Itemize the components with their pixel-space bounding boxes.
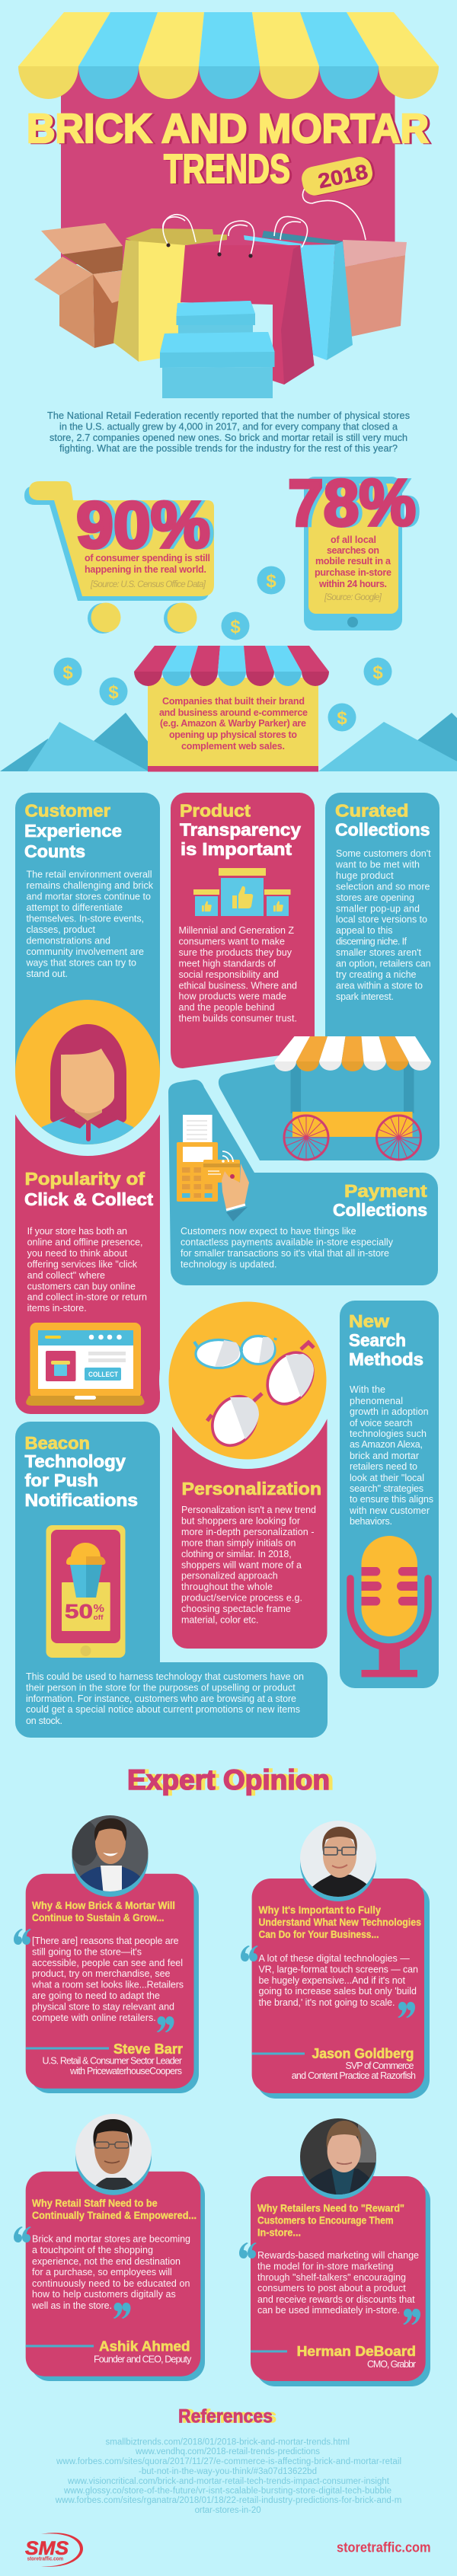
icon: yellow shopping bag (113, 215, 227, 362)
body text: search" strategies (350, 1483, 423, 1494)
attribution: CMO, Grabbr (367, 2359, 416, 2370)
body text: for smaller transactions so it's vital that all in-store (181, 1248, 389, 1259)
body text: want to be met with (335, 859, 420, 870)
heading: Transparency (180, 820, 301, 840)
heading: Methods (349, 1349, 423, 1369)
intro paragraph: store, 2.7 companies opened new ones. So brick and mortar retail is still very much (50, 433, 407, 443)
quote text: the model for in-store marketing (257, 2262, 394, 2272)
body text (26, 1671, 304, 1726)
icon: phone with 50% off offer: 50 (65, 1600, 93, 1623)
attribution (94, 2338, 192, 2365)
body text: them builds consumer trust. (178, 1013, 297, 1024)
body text: stores are opening (336, 892, 414, 903)
body text: as Amazon Alexa, (350, 1439, 423, 1450)
photo: Jason Goldberg (300, 1821, 376, 1901)
quote text: consumers to post about a product (257, 2283, 406, 2294)
quote text: compete with online retailers. (32, 2013, 156, 2023)
expert card: Jason Goldberg (241, 1816, 430, 2099)
quote text: be hugely expensive...And if it's not (259, 1975, 406, 1986)
heading: is Important (181, 839, 292, 859)
icons: dollar coins: $ (230, 617, 241, 637)
heading: Counts (24, 841, 85, 861)
logo: SMS storetraffic: storetraffic.com (27, 2557, 63, 2562)
photo: Herman DeBoard (300, 2118, 376, 2199)
quote text: can be used immediately in-store. (257, 2305, 400, 2316)
heading: Notifications (24, 1490, 138, 1510)
quote text (31, 1936, 184, 2023)
intro paragraph: The National Retail Federation recently reported that the number of physical stores (47, 410, 410, 421)
icon: closing quote (398, 2002, 415, 2018)
quote heading: Why Retailers Need to "Reward" (257, 2202, 404, 2214)
body text: of voice search (350, 1418, 413, 1428)
heading (24, 801, 122, 861)
body text: discerning niche. If (336, 937, 407, 947)
icon: pink shopping bag (181, 221, 314, 385)
body text (181, 1226, 394, 1269)
heading: for Push (24, 1470, 98, 1490)
quote text: experience, not the end destination (32, 2256, 181, 2267)
body text: Personalization isn't a new trend (181, 1505, 316, 1515)
icon: closing quote (113, 2303, 131, 2319)
quote text: well as in the store. (31, 2300, 112, 2311)
title (27, 106, 429, 192)
references list: www.forbes.com/sites/rganatra/2018/01/18/22-retail-industry-predictions-for-brick-and-m (55, 2496, 401, 2505)
icon: shop assistant portrait (15, 1000, 160, 1150)
body text (27, 1226, 147, 1314)
icon: opening quote (14, 2226, 31, 2242)
heading: Collections (335, 820, 430, 840)
panel: payment collections (168, 1080, 438, 1285)
quote text: how to help customers digitally as (32, 2289, 176, 2300)
quote heading: Continually Trained & Empowered... (32, 2209, 197, 2221)
heading: Personalization (181, 1479, 321, 1499)
icon: closing quote (157, 2016, 174, 2032)
statement text: complement web sales. (181, 741, 285, 752)
body text: selection and so more (336, 881, 430, 892)
statement text: opening up physical stores to (169, 729, 297, 740)
body text: area within a store to (336, 980, 423, 991)
statement text: and business around e-commerce (159, 707, 308, 718)
body text: choosing spectacle frame (181, 1604, 291, 1614)
heading: references: References (178, 2406, 273, 2428)
body text: Some customers don't (336, 848, 431, 859)
body text: and mortar stores continue to (26, 892, 151, 902)
panel: popularity of click and collect (4, 988, 171, 1414)
logo: SMS storetraffic (25, 2533, 83, 2567)
attribution (297, 2343, 416, 2370)
icon: gift box (343, 240, 407, 337)
body text: phenomenal (350, 1396, 403, 1406)
attribution (43, 2041, 183, 2076)
attribution (292, 2045, 416, 2081)
attribution: and Content Practice at Razorfish (292, 2070, 416, 2081)
body text: contactless payments available in-store especially (181, 1237, 394, 1247)
quote text: A lot of these digital technologies — (259, 1953, 410, 1964)
body text: on stock. (26, 1716, 62, 1726)
heading: Payment (344, 1181, 427, 1201)
quote text: for a purchase, so employees will (32, 2267, 172, 2278)
references list: www.glossy.co/store-of-the-future/vr-isnt-scalable-bursting-store-digital-tech-bubble (63, 2487, 391, 2496)
body text: their person in the store for the purposes of upselling or product (26, 1683, 296, 1693)
panel: new search methods (340, 1301, 439, 1688)
quote heading: Customers to Encourage Them (257, 2214, 394, 2226)
expert card: Ashik Ahmed (14, 2109, 205, 2381)
quote text: continuously need to be educated on (32, 2278, 190, 2289)
icon: card terminal and hand (177, 1115, 249, 1221)
quote text: physical store to stay relevant and (32, 2001, 174, 2012)
body text (349, 1384, 433, 1527)
statement text (159, 696, 308, 752)
quote text: are going to need to adapt the (32, 1990, 160, 2001)
body text: The retail environment overall (26, 870, 152, 880)
quote text: through "shelf-talkers" encouraging (257, 2272, 406, 2283)
quote text: accessible, people can see and feel (32, 1958, 183, 1968)
body text: spark interest. (336, 991, 394, 1002)
heading: Experience (24, 821, 122, 841)
small store with statement (134, 646, 329, 772)
body text: If your store has both an (27, 1226, 127, 1237)
statement text: Companies that built their brand (162, 696, 305, 707)
panel: curated collections and cart (219, 793, 439, 1160)
description: of consumer spending is still (85, 553, 210, 563)
icon: laptop with collect page: COLLECT (88, 1371, 118, 1378)
icon: thumbs-up podium (193, 868, 291, 916)
body text: growth in adoption (350, 1406, 429, 1417)
panel: product transparency (171, 793, 315, 1068)
attribution: Jason Goldberg (312, 2045, 414, 2061)
body text: an option, retailers can (336, 958, 431, 969)
price tag: 2018 (299, 154, 377, 240)
body text: meet high standards of (178, 958, 276, 969)
body text: material, color etc. (181, 1614, 259, 1625)
heading: Customer (24, 801, 110, 821)
store awning (134, 646, 329, 686)
description: searches on (327, 545, 379, 556)
icon: market cart (274, 1036, 431, 1160)
statement text: (e.g. Amazon & Warby Parker) are (160, 718, 306, 729)
body text: ethical business. Where and (178, 980, 297, 991)
references list: www.forbes.com/sites/quora/2017/11/27/e-commerce-is-affecting-brick-and-mortar-retail (56, 2457, 401, 2466)
quote heading: In-store... (257, 2226, 301, 2239)
panel: personalization (159, 1292, 336, 1649)
panel: customer experience counts (15, 793, 160, 1150)
panel: beacon technology (15, 1422, 328, 1738)
icons: dollar coins: $ (108, 682, 119, 703)
logo: SMS storetraffic: SMS (25, 2538, 69, 2559)
icons: dollar coins (53, 567, 391, 731)
figure 78%: 78% (288, 467, 416, 540)
quote heading: Understand What New Technologies (259, 1916, 421, 1928)
icon: stacked blue boxes (160, 301, 274, 398)
description: within 24 hours. (318, 579, 387, 589)
heading: Popularity of (24, 1169, 145, 1189)
body text: demonstrations and (26, 935, 110, 946)
quote heading (32, 2197, 197, 2221)
references list: smallbiztrends.com/2018/01/2018-brick-and-mortar-trends.html (105, 2438, 350, 2447)
body text: shoppers will want more of a (181, 1559, 302, 1570)
cart shadow (24, 486, 209, 601)
body text: technology is updated. (181, 1259, 277, 1269)
heading: Search (349, 1330, 406, 1350)
references list: -but-not-in-the-way-you-think/#3a07d13622bd (139, 2467, 317, 2476)
body text: stand out. (26, 969, 68, 979)
description: happening in the real world. (85, 564, 206, 575)
body text: more than simply initials on (181, 1537, 296, 1548)
body text (181, 1505, 316, 1625)
body text: remains challenging and brick (26, 880, 154, 891)
body text: local store versions to (336, 915, 427, 925)
stat: tablet 78% (288, 467, 416, 630)
quote heading: Why & How Brick & Mortar Will (32, 1899, 175, 1911)
quote text: product, try on merchandise, see (32, 1968, 171, 1979)
icon: phone with 50% off offer: % (93, 1602, 104, 1615)
attribution: Herman DeBoard (297, 2343, 416, 2359)
quote text: what a room set looks like...Retailers (31, 1980, 184, 1990)
body text: information. For instance, customers who are browsing at a store (26, 1693, 296, 1704)
quote text: and receive rewards or discounts that (257, 2294, 415, 2305)
heading (24, 1433, 138, 1510)
quote text: Brick and mortar stores are becoming (32, 2234, 190, 2245)
quote text: [There are] reasons that people are (32, 1936, 179, 1946)
figure 90%: 90% (76, 489, 210, 562)
body text: smaller stores aren't (336, 947, 422, 958)
photo: Ashik Ahmed (75, 2114, 152, 2195)
icon: laptop with collect page (26, 1323, 145, 1406)
quote heading: Why Retail Staff Need to be (32, 2197, 158, 2209)
description (85, 553, 210, 589)
body text: and collect" where (27, 1270, 105, 1281)
body text: and the people behind (178, 1002, 275, 1013)
title: BRICK AND MORTAR (27, 106, 429, 152)
quote text: a touchpoint of the shopping (32, 2245, 153, 2255)
body text: huge product (336, 870, 394, 881)
cart body (29, 481, 214, 596)
references list: ortar-stores-in-20 (195, 2506, 261, 2515)
heading (180, 801, 301, 859)
description: of all local (331, 535, 376, 545)
references list (55, 2438, 401, 2515)
heading: New (349, 1311, 389, 1331)
body text: how products were made (178, 991, 286, 1002)
body text: could get a special notice about current promotions or new items (26, 1704, 300, 1715)
quote text (31, 2234, 190, 2311)
body text: smaller pop-up and (336, 903, 420, 914)
body text: more in-depth personalization - (181, 1527, 314, 1537)
icons: dollar coins: $ (337, 708, 347, 729)
quote text: VR, large-format touch screens — can (259, 1965, 418, 1975)
icon: opening quote (239, 2242, 257, 2258)
body text: appeal to this (336, 925, 393, 936)
storefront wall (61, 66, 395, 264)
body text: items in-store. (27, 1303, 87, 1314)
description (315, 535, 391, 602)
body text (26, 870, 154, 979)
heading: Product (180, 801, 251, 821)
attribution: Founder and CEO, Deputy (94, 2354, 192, 2365)
store body (148, 678, 318, 766)
attribution: Steve Barr (113, 2041, 183, 2057)
photo: Steve Barr (72, 1815, 148, 1897)
body text: personalized approach (181, 1571, 278, 1582)
quote text: the brand,' it's not going to scale. (259, 1997, 395, 2008)
icon: opening quote (241, 1946, 258, 1962)
website address: storetraffic.com (337, 2540, 431, 2555)
description: mobile result in a (315, 556, 391, 567)
attribution: SVP of Commerce (346, 2060, 414, 2071)
body text: with new customer (349, 1505, 430, 1516)
body text (178, 925, 297, 1024)
body text: social responsibility and (178, 969, 279, 980)
quote heading: Can Do for Your Business... (259, 1928, 379, 1940)
description: purchase in-store (315, 567, 391, 578)
intro paragraph (47, 410, 410, 454)
body text: you need to think about (27, 1248, 128, 1259)
striped awning (18, 12, 439, 99)
body text: Customers now expect to have things like (181, 1226, 356, 1237)
body text: community involvement are (26, 946, 144, 957)
body text: attempt to differentiate (26, 902, 123, 913)
body text: customers can buy online (27, 1281, 136, 1291)
attribution: U.S. Retail & Consumer Sector Leader (43, 2056, 182, 2067)
quote text (259, 1953, 418, 2008)
icon: closing quote (403, 2309, 420, 2325)
body text: brick and mortar (350, 1451, 419, 1461)
body text: themselves. In-store events, (26, 914, 144, 924)
icon: microphone (350, 1536, 428, 1677)
body text: classes, product (26, 924, 96, 935)
description: [Source: Google] (324, 593, 382, 602)
icon: cardboard box (34, 223, 126, 348)
heading: Click & Collect (24, 1189, 153, 1209)
heading: Collections (333, 1200, 427, 1220)
body text: behaviors. (350, 1516, 392, 1527)
body text: and collect in-store or return (27, 1292, 147, 1303)
stat: shopping cart 90% (24, 481, 214, 634)
heading: Technology (24, 1451, 126, 1471)
body text: consumers want to make (178, 937, 285, 947)
illustration: shopping bags and boxes (34, 215, 407, 398)
quote heading: Continue to Sustain & Grow... (32, 1911, 165, 1923)
attribution: with PricewaterhouseCoopers (69, 2066, 182, 2076)
body text: online and offline presence, (27, 1237, 142, 1247)
body text: clothing or similar. In 2018, (181, 1549, 292, 1559)
intro paragraph: fighting. What are the possible trends for the industry for the rest of this year? (59, 443, 398, 454)
attribution: Ashik Ahmed (99, 2338, 190, 2354)
body text: retailers need to (350, 1461, 417, 1472)
body text: ways that stores can try to (26, 957, 136, 968)
quote text: going to increase sales but only 'build (259, 1986, 417, 1997)
description: [Source: U.S. Census Office Data] (90, 580, 206, 589)
icons: dollar coins: $ (372, 662, 383, 683)
heading: Beacon (24, 1433, 90, 1453)
heading: Curated (335, 801, 408, 821)
quote heading (32, 1899, 175, 1923)
icon: phone with 50% off offer (46, 1525, 125, 1658)
body text (335, 848, 431, 1002)
body text: offering services like "click (27, 1259, 138, 1269)
body text: to ensure this aligns (350, 1494, 433, 1505)
body text: try creating a niche (336, 969, 417, 980)
expert card: Herman DeBoard (239, 2114, 430, 2386)
body text: Millennial and Generation Z (178, 925, 294, 936)
icons: dollar coins: $ (62, 662, 73, 683)
header illustration: storefront (18, 12, 439, 264)
body text: With the (350, 1384, 385, 1395)
icon: opening quote (14, 1929, 31, 1945)
icon: eyeglasses on orange circle (169, 1302, 326, 1459)
icon: blue shopping bag (244, 216, 353, 360)
body text: technologies such (350, 1428, 427, 1439)
body text: This could be used to harness technology that customers have on (26, 1671, 304, 1682)
references list: www.vendhq.com/2018-retail-trends-predictions (135, 2447, 320, 2456)
heading: expert opinion: Expert Opinion (127, 1764, 330, 1796)
body text: sure the products they buy (178, 947, 292, 958)
body text: look at their "local (350, 1473, 424, 1483)
quote text: Rewards-based marketing will change (257, 2250, 419, 2261)
icons: dollar coins: $ (266, 571, 276, 592)
quote heading (259, 1904, 421, 1940)
body text: but shoppers are looking for (181, 1515, 300, 1526)
icon: phone with 50% off offer: off (93, 1614, 104, 1622)
heading (335, 801, 430, 840)
quote heading: Why It's Important to Fully (259, 1904, 381, 1916)
intro paragraph: in the U.S. actually grew by 4,000 in 2017, and for every company that closed a (59, 422, 398, 433)
mountains (0, 713, 457, 771)
quote text (257, 2250, 419, 2316)
quote heading (257, 2202, 404, 2239)
quote text: still going to the store—it's (32, 1946, 142, 1957)
title: TRENDS (164, 146, 290, 192)
heading (333, 1181, 427, 1220)
body text: product/service process e.g. (181, 1593, 302, 1604)
expert card: Steve Barr (14, 1812, 199, 2093)
cart wheels (88, 603, 197, 634)
price tag: 2018: 2018 (316, 160, 370, 193)
body text: throughout the whole (181, 1582, 273, 1592)
references list: www.visioncritical.com/brick-and-mortar-retail-tech-trends-impact-consumer-insight (67, 2477, 390, 2486)
heading (24, 1169, 153, 1209)
heading (349, 1311, 423, 1369)
